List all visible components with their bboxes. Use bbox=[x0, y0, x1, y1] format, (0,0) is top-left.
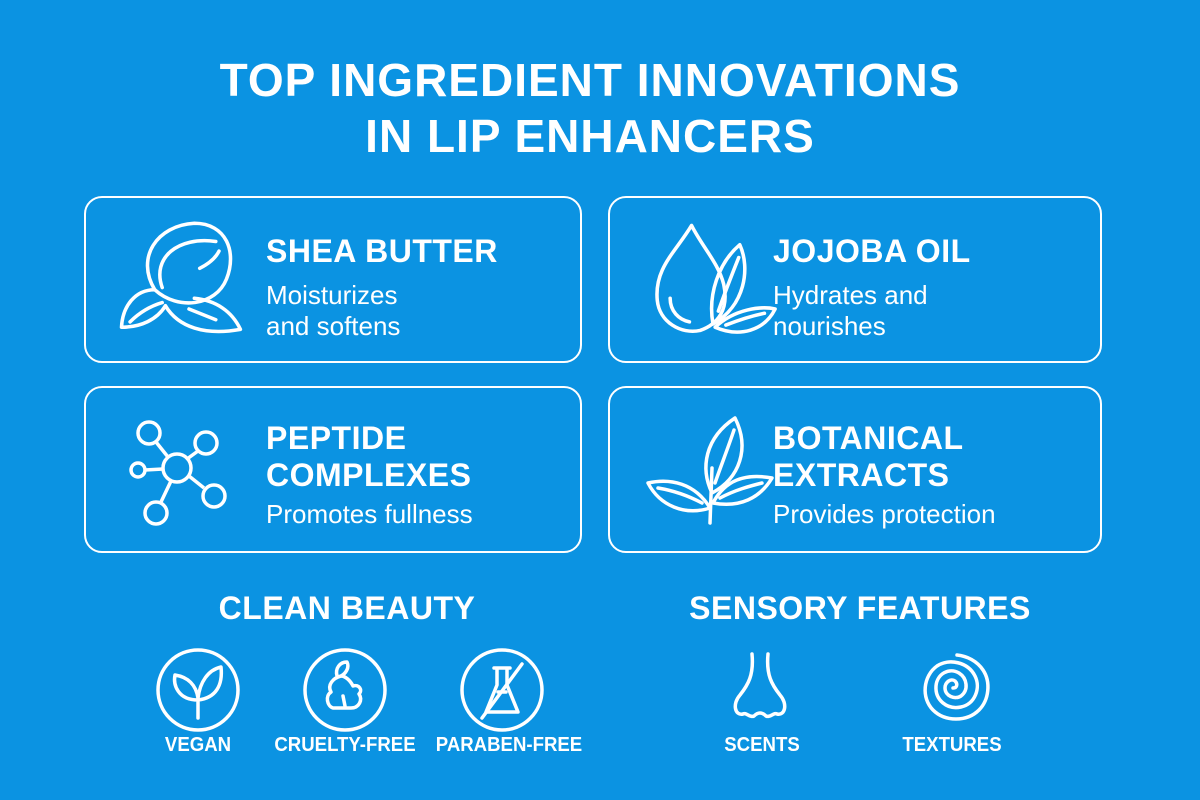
icon: drop and leaves bbox=[655, 224, 777, 334]
title: IN LIP ENHANCERS bbox=[365, 110, 815, 162]
heading: SHEA BUTTER bbox=[266, 233, 498, 269]
panel: peptide complexes bbox=[84, 386, 582, 553]
icon: nose bbox=[734, 652, 786, 718]
heading: sensory features: SENSORY FEATURES bbox=[689, 590, 1031, 626]
heading bbox=[266, 420, 471, 493]
panel: shea butter bbox=[84, 196, 582, 363]
title: TOP INGREDIENT INNOVATIONS bbox=[220, 54, 960, 106]
icon: paraben-free bbox=[460, 648, 544, 732]
text: Promotes fullness bbox=[266, 499, 473, 529]
icon: vegan bbox=[156, 648, 240, 732]
heading: BOTANICAL bbox=[773, 420, 964, 456]
text: Moisturizes bbox=[266, 280, 397, 310]
heading: COMPLEXES bbox=[266, 457, 471, 493]
heading: clean beauty: CLEAN BEAUTY bbox=[219, 590, 475, 626]
label: paraben-free: PARABEN-FREE bbox=[436, 734, 582, 756]
text: Hydrates and bbox=[773, 280, 928, 310]
label: scents: SCENTS bbox=[724, 734, 800, 756]
panel: jojoba oil bbox=[608, 196, 1102, 363]
icon: spiral bbox=[923, 653, 990, 721]
text bbox=[266, 280, 400, 341]
text: Provides protection bbox=[773, 499, 996, 529]
panel: botanical extracts bbox=[608, 386, 1102, 553]
text: nourishes bbox=[773, 311, 886, 341]
label: textures: TEXTURES bbox=[902, 734, 1002, 756]
label: cruelty-free: CRUELTY-FREE bbox=[274, 734, 416, 756]
heading: PEPTIDE bbox=[266, 420, 406, 456]
icon: cruelty-free bbox=[303, 648, 387, 732]
icon: leaves bbox=[646, 416, 774, 525]
icon: shea nut bbox=[120, 222, 242, 334]
heading: EXTRACTS bbox=[773, 457, 949, 493]
heading: JOJOBA OIL bbox=[773, 233, 971, 269]
label: vegan: VEGAN bbox=[165, 734, 231, 756]
heading bbox=[773, 420, 964, 493]
title bbox=[220, 54, 960, 162]
icon: molecule bbox=[129, 420, 227, 526]
text: and softens bbox=[266, 311, 400, 341]
text bbox=[773, 280, 928, 341]
